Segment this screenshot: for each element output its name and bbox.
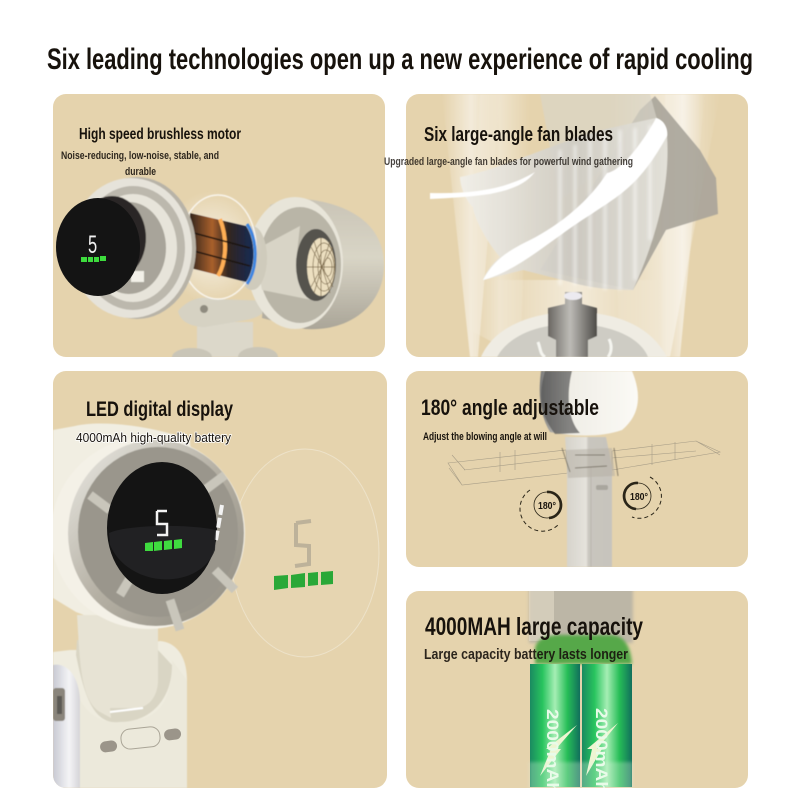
description: Adjust the blowing angle at will <box>423 431 547 443</box>
icon: 180 rotation dial left: 180° <box>538 501 556 512</box>
heading: 180° angle adjustable <box>421 395 599 420</box>
illustration: fan head and base <box>51 424 245 788</box>
battery labels <box>547 708 608 788</box>
icon: display disk: 5 <box>88 230 97 259</box>
description <box>61 150 219 178</box>
description: Noise-reducing, low-noise, stable, and <box>61 150 219 162</box>
heading: Six large-angle fan blades <box>424 124 613 146</box>
battery labels: 2000mAh <box>543 709 562 794</box>
illustration: ghost display circle <box>231 449 379 657</box>
icon: 180 rotation dial left <box>520 490 561 531</box>
heading: LED digital display <box>86 398 233 421</box>
heading: 4000MAH large capacity <box>425 613 643 641</box>
description: Large capacity battery lasts longer <box>424 646 628 663</box>
description: 4000mAh high-quality battery <box>76 430 231 445</box>
illustration: exploded motor view <box>56 177 384 367</box>
panel: 4000mAh large capacity <box>406 585 748 794</box>
icon: 180 rotation dial right <box>624 477 661 518</box>
icon: 180 rotation dial right: 180° <box>630 492 648 503</box>
illustration: fan with wireframe rotation <box>448 371 720 567</box>
panel: high speed brushless motor <box>53 94 385 367</box>
panel: LED digital display <box>51 371 387 788</box>
illustration: battery pack <box>529 585 633 794</box>
icon: display disk <box>56 198 140 296</box>
illustration: fan blade and hub <box>430 94 720 357</box>
panel: 180 degree angle adjustable <box>406 371 748 567</box>
description: Upgraded large-angle fan blades for powerful wind gathering <box>384 156 633 168</box>
heading: High speed brushless motor <box>79 126 241 143</box>
battery labels: 2000mAh <box>592 708 611 793</box>
description: durable <box>125 166 156 178</box>
icon: digit and battery bars <box>145 511 182 551</box>
icon: power button <box>99 726 182 753</box>
panel: six large-angle fan blades <box>384 94 748 357</box>
